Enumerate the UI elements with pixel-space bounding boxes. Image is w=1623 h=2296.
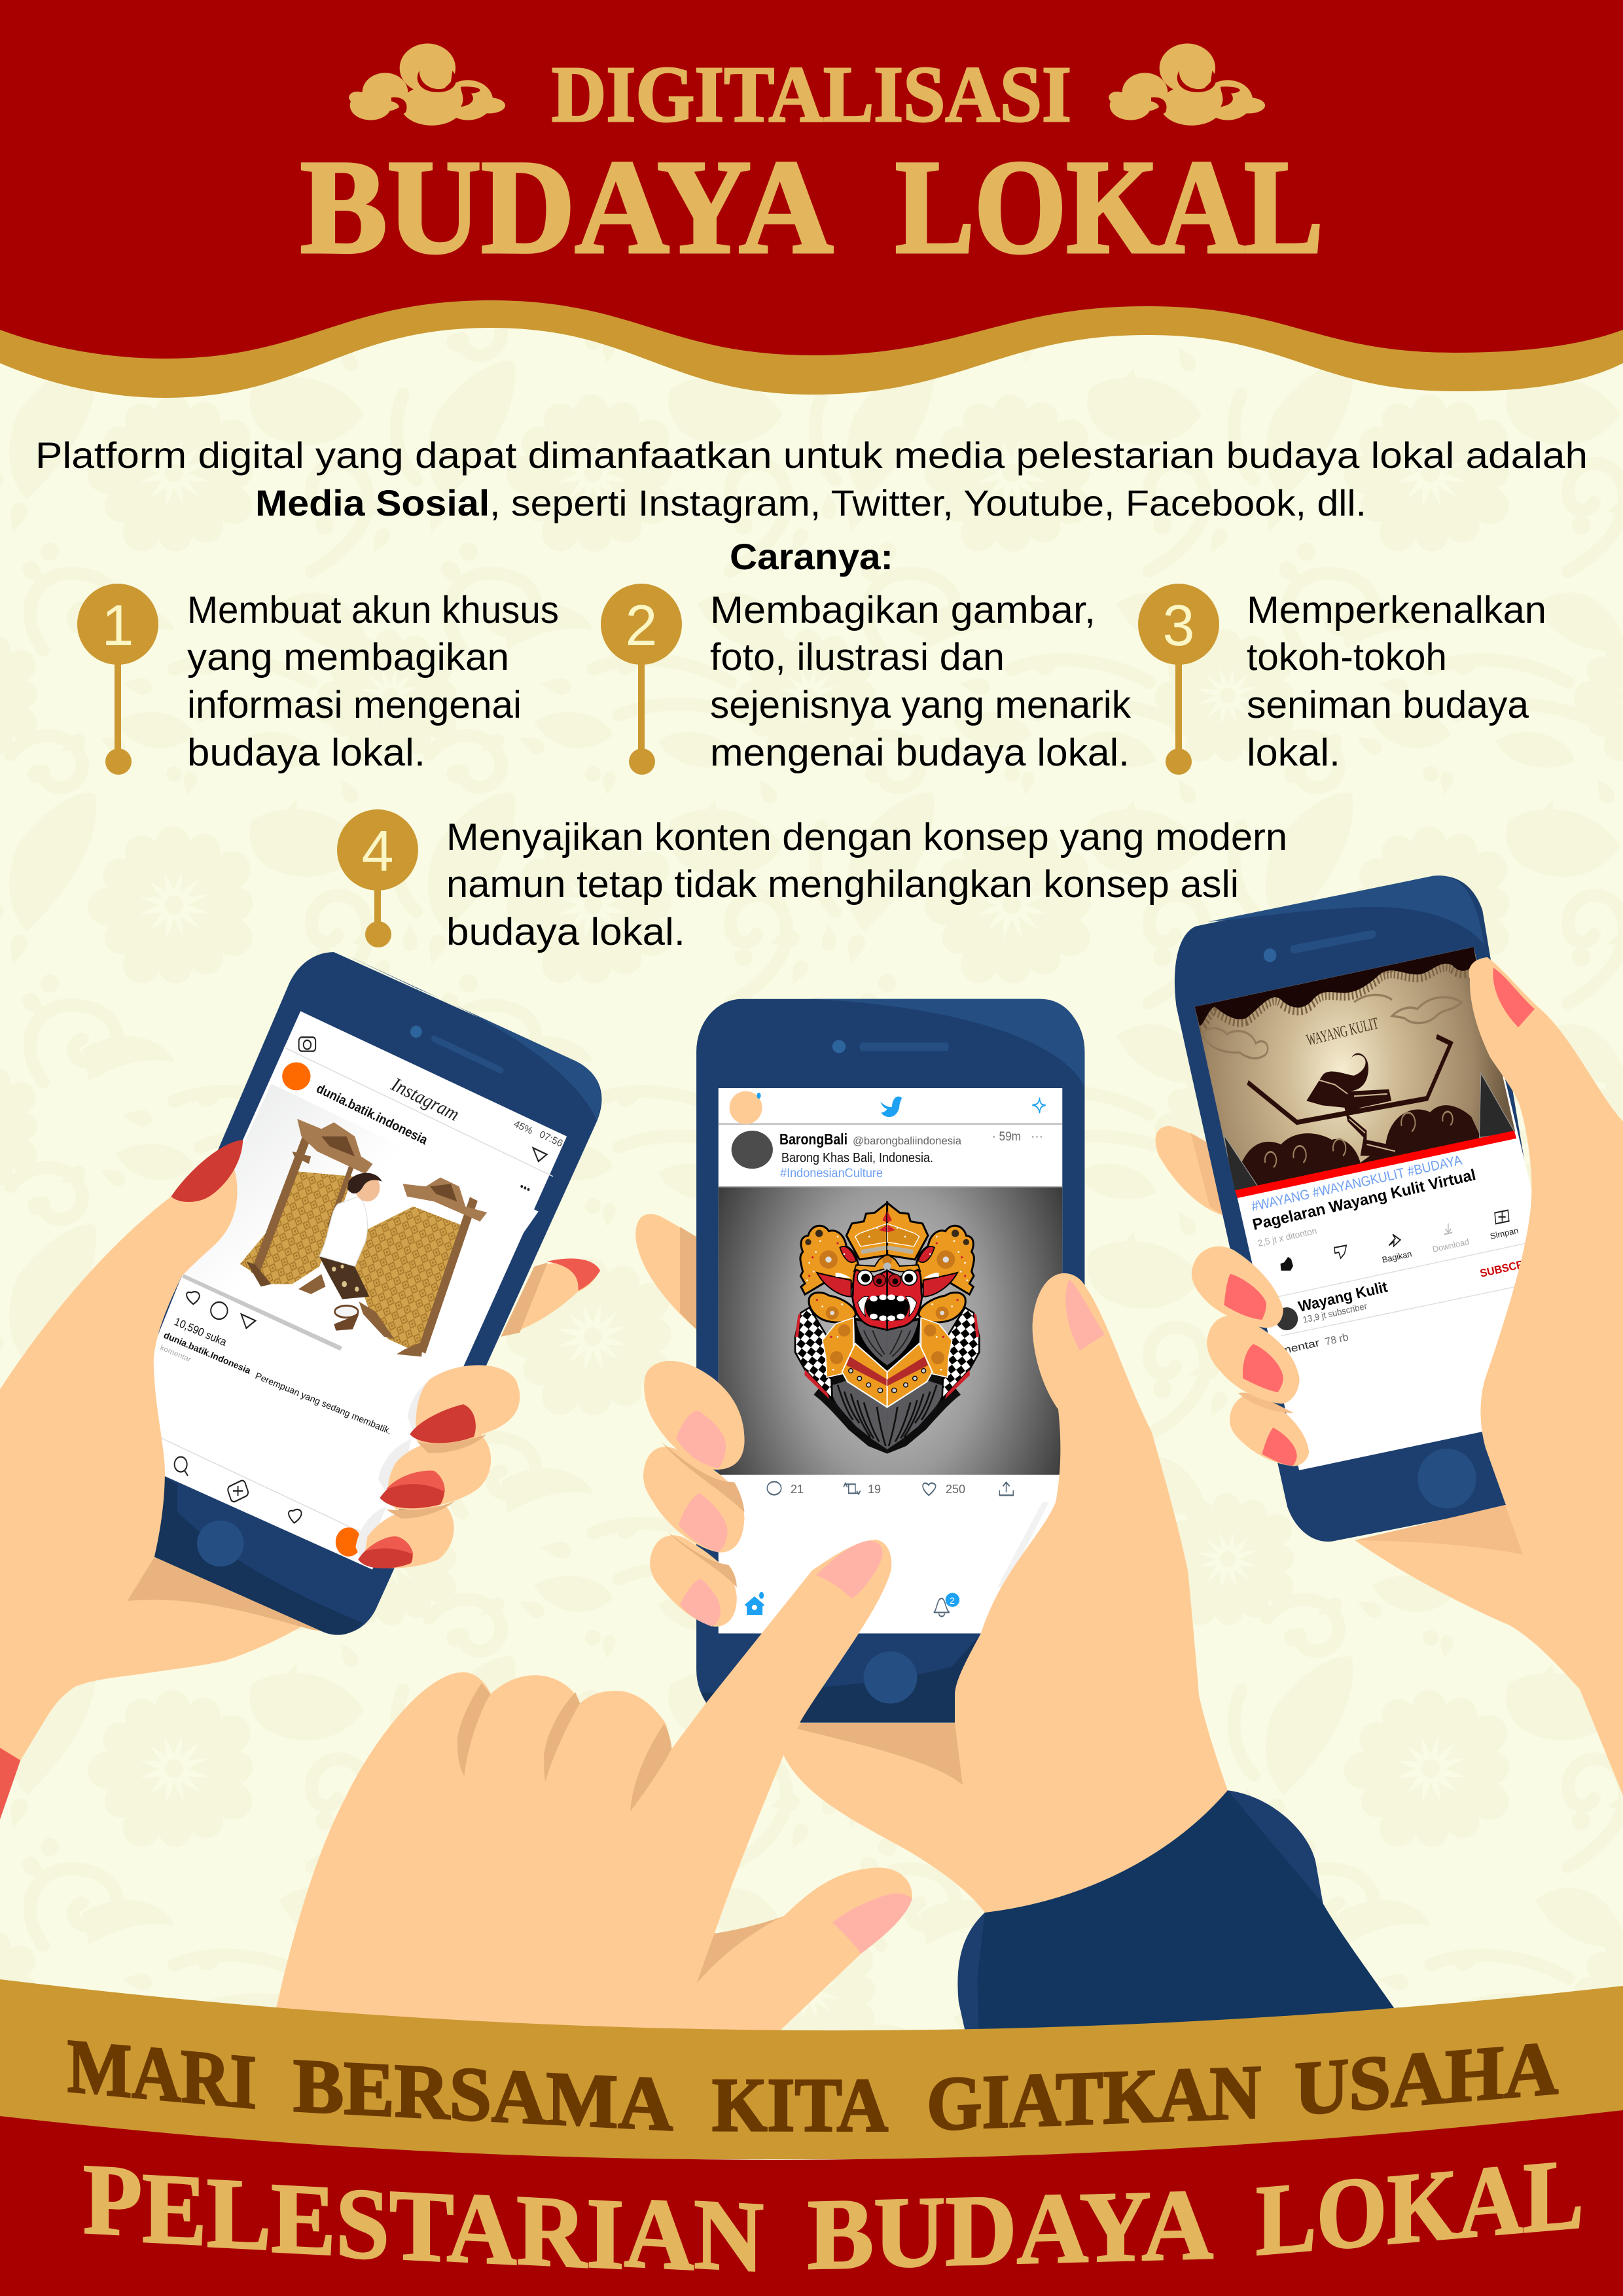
step 4 — [337, 809, 1287, 953]
step 3 text: lokal. — [1247, 732, 1340, 774]
step 4 marker — [337, 809, 418, 947]
instagram texts: Instagram — [387, 1073, 463, 1125]
front fingers on twitter phone — [643, 1361, 745, 1627]
tweet texts: #IndonesianCulture — [780, 1167, 883, 1180]
screen — [1195, 947, 1535, 1470]
intro text: Caranya: — [730, 536, 893, 577]
icon: twitter bird — [880, 1097, 902, 1117]
instagram texts: komentar — [159, 1344, 192, 1364]
title line 1: DIGITALISASI — [552, 50, 1071, 139]
step 1 text: Membuat akun khusus — [187, 589, 559, 631]
step 4 text: namun tetap tidak menghilangkan konsep asli — [446, 863, 1239, 906]
slogan line 2: PELESTARIAN — [83, 2144, 764, 2296]
wayang and youtube texts: Simpan — [1489, 1226, 1520, 1241]
gold wave band — [0, 0, 1623, 398]
slogan line 1: GIATKAN — [927, 2050, 1261, 2147]
footer banner — [0, 1979, 1623, 2296]
wayang and youtube texts: 78 rb — [1324, 1332, 1349, 1348]
screen — [125, 1011, 567, 1570]
red header field — [0, 0, 1623, 359]
slogan line 1 — [67, 2024, 1558, 2148]
step 1 marker: 1 — [102, 593, 134, 658]
sleeve — [957, 1790, 1395, 2046]
phone body — [125, 952, 601, 1635]
step 3 marker: 3 — [1163, 593, 1194, 658]
instagram texts: dunia.batik.indonesia — [314, 1082, 430, 1148]
step 1 text: informasi mengenai — [187, 684, 522, 726]
holding hand with thumb — [783, 1273, 1228, 1913]
tweet texts: BarongBali — [779, 1131, 847, 1148]
step 2 text: foto, ilustrasi dan — [710, 636, 1005, 679]
barong image background — [719, 1188, 1062, 1475]
slogan line 1: USAHA — [1294, 2026, 1558, 2132]
wayang and youtube texts: Download — [1431, 1237, 1470, 1254]
step 3 — [1138, 584, 1546, 775]
icon: sparkle — [1032, 1098, 1046, 1113]
intro text: Platform digital yang dapat dimanfaatkan untuk media pelestarian budaya lokal adalah — [35, 434, 1588, 476]
step 2 text: mengenai budaya lokal. — [710, 732, 1130, 774]
instagram texts — [159, 1073, 565, 1436]
slogan line 2: BUDAYA — [808, 2169, 1213, 2291]
slogan line 2 — [83, 2138, 1584, 2296]
left hand — [0, 1140, 520, 1820]
step 2 marker: 2 — [626, 593, 657, 658]
icon: bell — [934, 1598, 950, 1616]
step 2 text — [710, 589, 1132, 774]
gold ribbon — [0, 1979, 1623, 2159]
instagram texts: 10,590 suka — [172, 1315, 229, 1349]
instagram icons — [175, 1037, 547, 1523]
fingers — [407, 1379, 432, 1442]
phone: Instagram held by left hand — [0, 952, 601, 1820]
wayang and youtube texts: Pagelaran Wayang Kulit Virtual — [1251, 1166, 1478, 1234]
tweet texts: 2 — [950, 1595, 955, 1606]
step 4 text: Menyajikan konten dengan konsep yang modern — [446, 816, 1287, 858]
instagram texts: 07:56 — [537, 1129, 565, 1149]
step 3 text: tokoh-tokoh — [1247, 636, 1447, 679]
step 4 text — [446, 816, 1287, 953]
wayang and youtube texts — [1250, 1015, 1543, 1360]
post image — [184, 1084, 539, 1382]
pointing hand — [271, 1540, 912, 2034]
right hand front fingers — [1192, 1246, 1309, 1466]
tweet texts: ··· — [1031, 1130, 1043, 1144]
tweet avatar — [732, 1131, 773, 1169]
tweet texts: 250 — [946, 1483, 965, 1496]
tweet texts: 19 — [868, 1483, 881, 1496]
wayang and youtube texts: Wayang Kulit — [1296, 1278, 1389, 1315]
icon: cloud ornament left — [349, 44, 505, 126]
icon: barong mask — [795, 1203, 979, 1454]
step 1 marker — [77, 584, 158, 775]
tweet texts: @barongbaliindonesia — [853, 1135, 962, 1147]
tweet texts: 21 — [791, 1483, 804, 1496]
wayang and youtube texts: WAYANG KULIT — [1305, 1015, 1380, 1050]
title line 2: LOKAL — [895, 133, 1323, 281]
instagram texts: Perempuan yang sedang membatik. — [254, 1370, 393, 1436]
instagram texts: 45% — [512, 1118, 535, 1137]
intro text — [35, 434, 1588, 577]
phone: YouTube wayang held by right hand — [1156, 875, 1623, 1795]
phone body and back finger — [1156, 875, 1535, 1542]
step 3 text: seniman budaya — [1247, 684, 1529, 726]
wayang figure — [1248, 1036, 1451, 1122]
phone: Twitter in the centre — [635, 999, 1084, 1723]
slogan line 1: MARI — [67, 2024, 257, 2125]
tweet texts: · 59m — [992, 1130, 1021, 1144]
wayang and youtube texts: Bagikan — [1381, 1248, 1413, 1265]
title line 2 — [300, 133, 1323, 281]
intro text: Media Sosial , seperti Instagram, Twitter, Youtube, Facebook, dll. — [255, 482, 1366, 523]
step 1 text: yang membagikan — [187, 636, 509, 679]
wayang and youtube texts: Komentar — [1264, 1337, 1321, 1360]
step 1 — [77, 584, 559, 775]
video thumbnail — [1195, 947, 1516, 1191]
step 4 text: budaya lokal. — [446, 911, 685, 953]
batik illustration — [240, 1119, 487, 1356]
red footer field — [0, 2110, 1623, 2296]
icon: cloud ornament right — [1109, 44, 1265, 126]
wayang and youtube texts: SUBSCRIBE — [1479, 1254, 1543, 1280]
phone body — [635, 999, 1084, 1723]
header banner — [0, 0, 1623, 398]
right hand palm and thumb — [1355, 957, 1623, 1795]
youtube icons — [1281, 1257, 1293, 1271]
step 3 marker — [1138, 584, 1219, 775]
slogan line 1: BERSAMA — [293, 2043, 673, 2147]
tweet texts — [779, 1130, 1043, 1606]
wayang and youtube texts: 13,9 jt subscriber — [1302, 1301, 1368, 1325]
slogan line 2: LOKAL — [1256, 2138, 1584, 2277]
reaction icons — [767, 1482, 1013, 1495]
step 2 text: sejenisnya yang menarik — [710, 684, 1132, 726]
step 2 marker — [601, 584, 682, 775]
step 1 text: budaya lokal. — [187, 732, 425, 774]
profile avatar — [730, 1091, 762, 1124]
wayang and youtube texts: #WAYANG #WAYANGKULIT #BUDAYA — [1250, 1153, 1463, 1214]
wayang and youtube texts: 2,5 jt x ditonton — [1257, 1225, 1317, 1248]
thumb nail — [1065, 1279, 1105, 1351]
step 3 text: Memperkenalkan — [1247, 589, 1546, 631]
tweet texts: Barong Khas Bali, Indonesia. — [781, 1151, 933, 1165]
title line 2: BUDAYA — [300, 133, 833, 281]
screen — [719, 1088, 1062, 1633]
back finger — [501, 1258, 600, 1337]
step 2 text: Membagikan gambar, — [710, 589, 1096, 631]
step 4 marker: 4 — [362, 819, 393, 883]
step 2 — [601, 584, 1132, 775]
icon: home — [745, 1597, 764, 1615]
slogan line 1: KITA — [712, 2063, 888, 2148]
instagram texts: dunia.batik.Indonesia — [162, 1330, 253, 1376]
step 1 text — [187, 589, 559, 774]
step 3 text — [1247, 589, 1546, 774]
